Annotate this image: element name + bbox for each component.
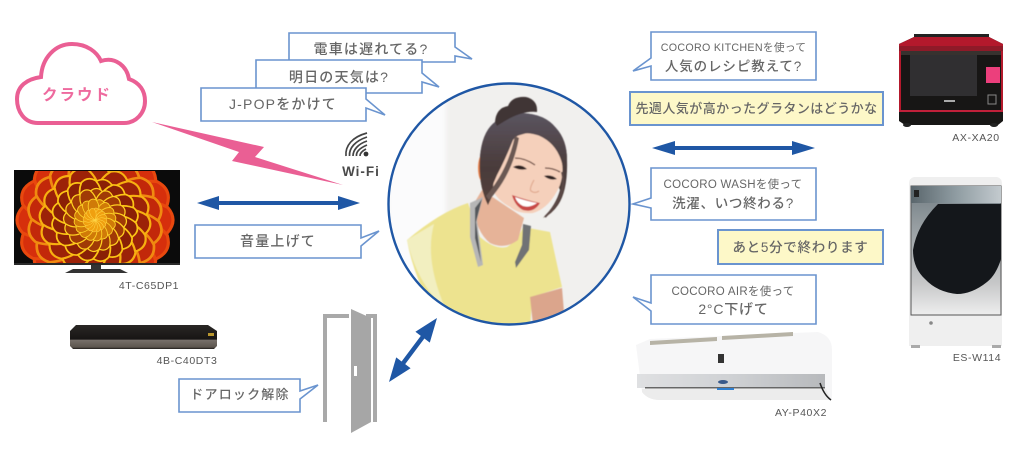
Wi-Fi label: Wi-Fi [342,164,380,179]
mouth [512,195,540,211]
double arrow: kitchen [652,141,815,155]
model label: air conditioner: AY-P40X2 [775,407,827,419]
speech bubble: COCORO AIR: COCORO AIRを使って [671,284,795,298]
double arrow: TV [197,196,360,210]
model label: washer: ES-W114 [953,352,1001,364]
neck [473,190,524,246]
speech bubble: volume [195,225,379,258]
reply: 5 minutes [718,230,883,264]
model label: recorder: 4B-C40DT3 [157,355,217,367]
speech bubble: COCORO KITCHEN: 人気のレシピ教えて? [665,59,802,74]
speech bubble: COCORO KITCHEN: COCORO KITCHENを使って [661,41,806,54]
arm [530,288,564,325]
speech bubble: volume: 音量上げて [240,233,316,249]
hair fringe [479,112,568,190]
speech bubble: COCORO AIR: 2°C下げて [698,301,769,317]
washing machine [909,177,1002,348]
model label: oven: AX-XA20 [952,132,1000,144]
television [14,170,180,273]
ear [477,157,482,180]
television stand [65,265,128,273]
cloud label: クラウド [42,86,112,104]
speech bubble: train [289,33,472,62]
speech bubble: COCORO WASH [633,168,816,220]
speech bubble: COCORO WASH: 洗濯、いつ終わる? [672,195,794,211]
cloud icon [17,44,145,123]
speech bubble: J-POP [201,88,385,121]
blu-ray recorder [70,325,217,349]
hair back [480,113,567,218]
flower on screen [15,171,175,263]
door [323,309,377,433]
speech bubble: weather: 明日の天気は? [289,69,389,85]
speech bubble: door lock: ドアロック解除 [190,387,290,402]
double arrow: door [389,318,437,382]
speech bubble: train: 電車は遅れてる? [314,41,428,57]
reply: gratin: 先週人気が高かったグラタンはどうかな [635,101,878,116]
nose [530,180,539,192]
hair bun [495,97,537,126]
speech bubble: weather [256,60,439,93]
face [493,133,562,213]
model label: TV: 4T-C65DP1 [119,280,179,292]
icon: Wi-Fi [342,133,380,179]
reply: 5 minutes: あと5分で終わります [732,240,869,255]
neck band speaker [470,197,483,267]
lightning bolt [152,122,343,185]
speech bubble: J-POP: J-POPをかけて [229,96,337,112]
shirt [407,203,562,330]
speech bubble: COCORO KITCHEN [633,32,816,80]
reply: gratin [630,92,883,125]
speech bubble: COCORO AIR [633,275,816,324]
speech bubble: door lock [179,379,318,412]
microwave oven [899,34,1003,127]
circular portrait of woman [388,83,630,330]
speech bubble: COCORO WASH: COCORO WASHを使って [664,177,802,191]
air conditioner [636,332,832,400]
eyes [513,165,527,170]
